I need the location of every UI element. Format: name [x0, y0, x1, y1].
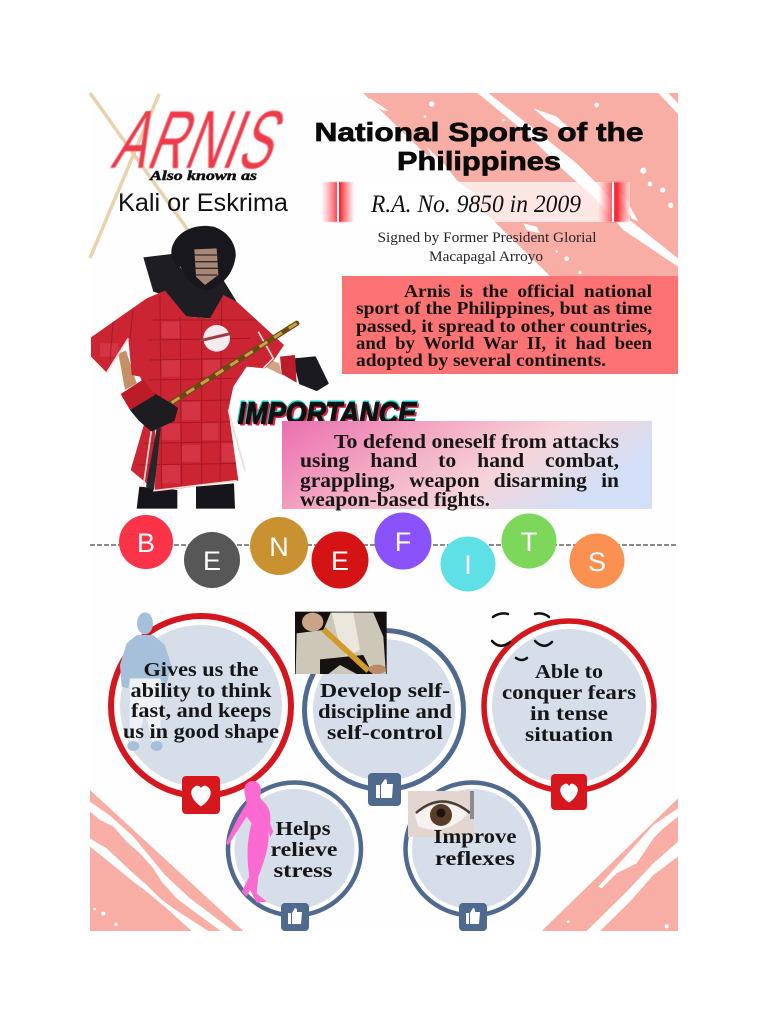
benefits letters: N: [269, 532, 289, 562]
text: think fast: ability to think: [130, 680, 272, 702]
text: conquer fears: conquer fears: [502, 682, 636, 704]
benefits letters: B: [137, 528, 155, 558]
benefits letters: S: [588, 547, 606, 577]
panel: importance text: weapon-based fights.: [300, 490, 490, 511]
signed by text: [378, 230, 596, 265]
heading: IMPORTANCE: IMPORTANCE: [238, 396, 417, 430]
text: think fast: [123, 659, 279, 743]
ribbon: R.A. No. 9850 in 2009: R.A. No. 9850 in 2009: [370, 191, 581, 218]
text: relieve stress: [270, 818, 338, 882]
text: self-discipline: self-control: [327, 722, 444, 744]
benefit circle: think fast: [111, 612, 291, 814]
photo: arnis fighter in armour: [91, 226, 328, 509]
icon: blue human figure: [120, 612, 172, 751]
text: relieve stress: Helps: [276, 818, 331, 840]
tunic quilting: [100, 297, 257, 488]
benefits letters: F: [395, 527, 411, 557]
legs: [137, 483, 235, 509]
cape: [143, 254, 237, 318]
heading: National Sports of the Philippines: [314, 117, 644, 176]
heading: National Sports of the Philippines: Philippines: [397, 146, 561, 176]
title: ARNIS: ARNIS: [103, 95, 298, 186]
icon: thumbs-up badge: [281, 903, 309, 931]
subtitle: Kali or Eskrima: Kali or Eskrima: [118, 189, 288, 217]
crossed sticks: [90, 93, 190, 258]
text: relieve stress: stress: [274, 860, 333, 882]
ribbon: R.A. No. 9850 in 2009: [322, 182, 631, 222]
heading: IMPORTANCE: IMPORTANCE: [237, 394, 418, 429]
text: self-discipline: Develop self-: [320, 680, 450, 702]
icon: thumbs-up badge: [368, 773, 401, 806]
tunic: [91, 291, 284, 492]
heading: IMPORTANCE: IMPORTANCE: [240, 397, 419, 432]
brush stroke: top right: [363, 93, 678, 276]
panel: importance text: grappling, weapon disarming in: [300, 471, 619, 492]
arm skin: [118, 351, 137, 390]
helmet: [171, 226, 236, 291]
panel: official national sport: sport of the Philippines, but as time: [356, 298, 652, 318]
icon: closed eyes and smile marks: [492, 613, 552, 660]
panel: importance text: [282, 421, 652, 511]
text: think fast: us in good shape: [123, 721, 279, 743]
icon: thumbs-up badge: [459, 903, 487, 931]
text: self-discipline: discipline and: [318, 701, 452, 723]
icon: heart badge: [551, 774, 587, 810]
benefits letters: I: [464, 550, 472, 580]
panel: official national sport: passed, it spread to other countries,: [356, 316, 652, 336]
text: conquer fears: situation: [525, 724, 613, 746]
text: conquer fears: Able to: [535, 661, 603, 683]
benefits letters: [119, 512, 624, 592]
text: relieve stress: relieve: [270, 839, 338, 861]
photo: black belt and stick: [295, 612, 387, 674]
right glove: [294, 357, 328, 390]
benefit circle: self-discipline: [295, 612, 464, 806]
heading: National Sports of the Philippines: National Sports of the: [314, 117, 644, 147]
signed by text: Macapagal Arroyo: [429, 249, 543, 265]
text: conquer fears: in tense: [530, 703, 608, 725]
chest badge: [203, 325, 230, 352]
text: reflexes: reflexes: [435, 848, 515, 870]
benefits letters: E: [203, 546, 221, 576]
text: conquer fears: [502, 661, 636, 746]
text: reflexes: Improve: [434, 826, 517, 848]
photo: eye close-up: [408, 791, 474, 837]
text: think fast: fast, and keeps: [131, 700, 271, 722]
left glove: [132, 395, 177, 430]
benefits letters: T: [521, 527, 537, 557]
signed by text: Signed by Former President Glorial: [378, 230, 596, 246]
text: think fast: Gives us the: [144, 659, 259, 681]
panel: official national sport: adopted by several continents.: [356, 350, 606, 370]
text: self-discipline: [318, 680, 452, 744]
brush stroke: bottom right: [542, 798, 678, 931]
panel: official national sport: and by World War II, it had been: [356, 333, 652, 353]
text: reflexes: [434, 826, 517, 870]
benefit circle: reflexes: [406, 782, 538, 931]
stick: [169, 323, 297, 404]
benefits letters: E: [331, 546, 349, 576]
icon: heart badge: [182, 776, 220, 814]
icon: pink woman silhouette: [226, 781, 273, 903]
brush stroke: bottom left: [90, 790, 243, 931]
benefit circle: conquer fears: [484, 613, 654, 810]
poster background: [90, 93, 678, 931]
subtitle: also known as: Also known as: [149, 169, 258, 184]
panel: official national sport: Arnis is the official national: [404, 281, 652, 301]
benefits dashed divider: [90, 544, 678, 546]
panel: importance text: using hand to hand combat,: [300, 451, 619, 472]
tunic trim: [107, 332, 273, 491]
benefit circle: relieve stress: [226, 781, 361, 931]
panel: importance text: To defend oneself from attacks: [334, 432, 619, 453]
panel: official national sport: [342, 276, 678, 374]
